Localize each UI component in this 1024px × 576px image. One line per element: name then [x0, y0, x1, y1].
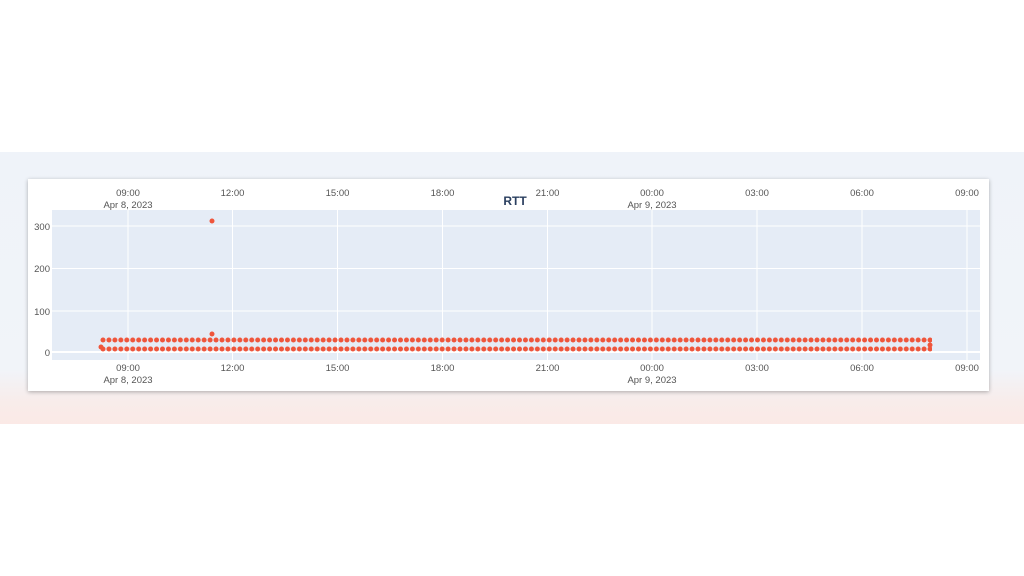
y axis labels: 100 [34, 307, 50, 318]
plot area [52, 210, 980, 360]
top x axis labels: 09:00 [955, 188, 979, 199]
top x axis labels: Apr 8, 2023 [103, 200, 153, 211]
bottom x axis labels: 03:00 [745, 363, 769, 374]
top x axis labels: 15:00 [326, 188, 349, 199]
bottom x axis labels: Apr 8, 2023 [103, 375, 153, 386]
y axis labels [34, 222, 50, 359]
chart card [28, 179, 989, 391]
top x axis labels: 21:00 [536, 188, 559, 199]
bottom x axis labels: 12:00 [221, 363, 244, 374]
top x axis labels: 06:00 [850, 188, 874, 199]
top x axis labels: Apr 9, 2023 [627, 200, 677, 211]
top x axis labels [103, 188, 979, 211]
bottom x axis labels: 18:00 [431, 363, 454, 374]
bottom x axis labels: 21:00 [536, 363, 559, 374]
bottom x axis labels: 00:00 [640, 363, 664, 374]
y axis labels: 0 [45, 348, 50, 359]
bottom x axis labels: 15:00 [326, 363, 349, 374]
top x axis labels: 18:00 [431, 188, 454, 199]
bottom x axis labels: Apr 9, 2023 [627, 375, 677, 386]
title: RTT [503, 194, 527, 208]
top x axis labels: 03:00 [745, 188, 769, 199]
top x axis labels: 12:00 [221, 188, 244, 199]
top x axis labels: 09:00 [116, 188, 140, 199]
background band [0, 152, 1024, 424]
bottom x axis labels: 06:00 [850, 363, 874, 374]
bottom x axis labels: 09:00 [116, 363, 140, 374]
top x axis labels: 00:00 [640, 188, 664, 199]
y axis labels: 200 [34, 264, 50, 275]
bottom x axis labels: 09:00 [955, 363, 979, 374]
bottom x axis labels [103, 363, 979, 386]
scatter points [98, 218, 932, 354]
y axis labels: 300 [34, 222, 50, 233]
